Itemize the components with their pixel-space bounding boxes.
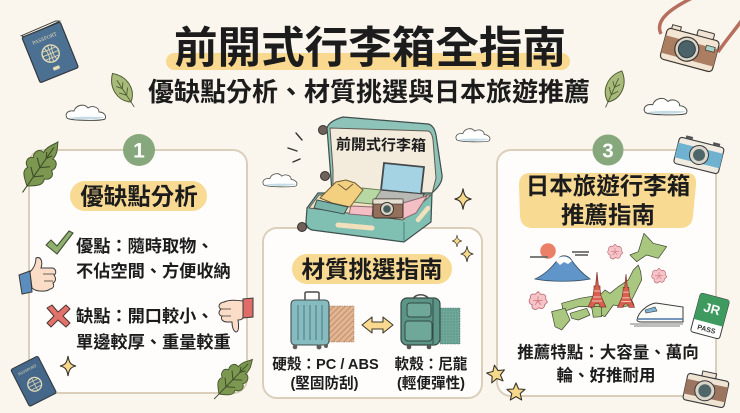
heading pill: 推薦指南 — [561, 202, 655, 228]
suitcase side handle — [418, 208, 428, 220]
suitcase wheel — [298, 222, 306, 232]
icon: passport bottom left: PASSPORT — [17, 363, 38, 377]
icon: camera top right — [660, 22, 722, 72]
icon: cloud beside suitcase left — [263, 174, 297, 187]
icon: brown camera — [683, 368, 730, 408]
hard shell suitcase with swatch — [291, 292, 354, 350]
second tower — [617, 274, 635, 307]
Mount Fuji and sun — [530, 243, 590, 281]
soft shell label: 軟殼：尼龍 — [395, 355, 468, 373]
icon: sparkle medium — [461, 246, 473, 262]
recommendation text — [517, 342, 699, 385]
cherry blossom left — [529, 292, 548, 310]
icon: teal camera — [673, 134, 725, 174]
icon: leaf beside title right — [598, 68, 629, 111]
pros text: 優點：隨時取物、 — [76, 236, 214, 256]
Tokyo towers — [588, 272, 606, 307]
suitcase base — [306, 193, 432, 242]
icon: sparkle small — [452, 235, 462, 247]
number badge 1: 1 — [133, 140, 145, 162]
icon: JR pass — [690, 293, 730, 339]
bullet train — [630, 303, 683, 326]
suitcase front handle — [338, 225, 372, 228]
icon: passport top left — [21, 20, 78, 83]
icon: cloud upper left — [66, 105, 106, 120]
icon: sparkle left panel — [60, 356, 76, 376]
cherry blossom right — [652, 268, 667, 283]
motion lines — [288, 133, 302, 162]
pros text — [76, 236, 231, 281]
illustration: Japan map with landmarks — [529, 233, 683, 330]
panel: pros and cons — [29, 134, 247, 393]
hard shell label: (堅固防刮) — [290, 374, 359, 392]
map of Japan — [552, 233, 667, 330]
icon: JR pass: JR — [702, 299, 722, 318]
recommendation text: 推薦特點：大容量、萬向 — [517, 342, 699, 362]
icon: star — [486, 364, 506, 383]
cons text: 單邊較厚、重量較重 — [76, 332, 231, 352]
icon: camera strap — [659, 0, 740, 52]
cons text — [76, 306, 231, 352]
heading pill — [519, 173, 696, 228]
icon: cloud beside suitcase right — [456, 129, 490, 142]
title: 前開式行李箱全指南 — [174, 25, 566, 73]
double arrow — [362, 317, 393, 333]
icon: thumbs down — [219, 298, 253, 332]
icon: star lower — [507, 383, 525, 400]
suitcase label: 前開式行李箱 — [336, 135, 426, 155]
icon: JR pass: PASS — [696, 324, 716, 336]
hard shell label: 硬殼：PC / ABS — [272, 355, 379, 373]
icon: thumbs up — [19, 258, 56, 294]
recommendation text: 輪、好推耐用 — [556, 365, 656, 385]
heading pill: 優缺點分析 — [80, 184, 198, 210]
icon: passport bottom left — [11, 356, 57, 407]
icon: sparkle right of suitcase — [455, 188, 471, 210]
number badge 3: 3 — [602, 140, 614, 162]
icon: passport top left: PASSPORT — [32, 31, 59, 47]
icon: check mark — [46, 231, 73, 254]
icon: red cross — [47, 305, 70, 327]
soft shell suitcase with swatch — [401, 295, 460, 349]
panel: Japan guide — [497, 134, 716, 396]
panel: material guide — [263, 228, 482, 398]
icon: oak leaf top left — [10, 133, 70, 201]
hard shell label — [272, 355, 379, 392]
number badge 1 — [123, 134, 155, 166]
pros text: 不佔空間、方便收納 — [76, 261, 231, 281]
icon: leaf beside title left — [106, 69, 141, 112]
heading pill: 日本旅遊行李箱 — [526, 173, 690, 199]
soft shell label: (輕便彈性) — [397, 375, 465, 392]
packed clothes — [314, 180, 427, 219]
laptop — [368, 163, 424, 206]
heading pill: 材質挑選指南 — [302, 256, 442, 282]
camera in suitcase — [373, 199, 403, 218]
cherry blossom — [608, 244, 623, 259]
number badge 3 — [592, 134, 624, 166]
subtitle: 優缺點分析、材質挑選與日本旅遊推薦 — [148, 77, 590, 107]
icon: oak leaf bottom right — [205, 350, 262, 408]
illustration: open suitcase — [288, 117, 442, 242]
icon: cloud upper right — [644, 98, 687, 115]
soft shell label — [395, 355, 468, 392]
cons text: 缺點：開口較小、 — [76, 306, 214, 326]
suitcase lid — [318, 117, 442, 194]
